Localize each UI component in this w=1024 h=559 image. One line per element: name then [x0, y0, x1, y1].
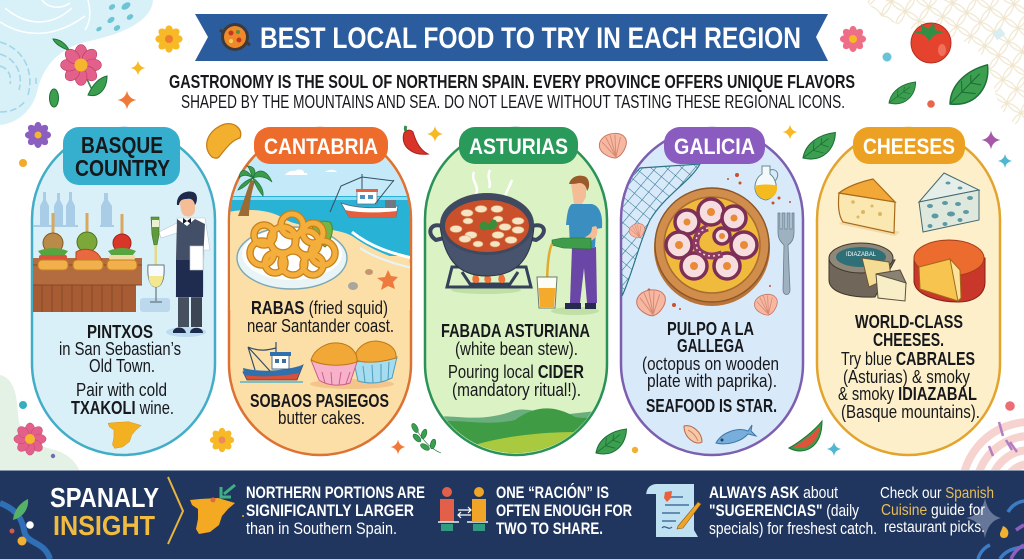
- icon: clam: [684, 426, 702, 443]
- basque text: Old Town.: [89, 356, 155, 376]
- galicia text: SEAFOOD IS STAR.: [646, 396, 777, 416]
- icon: scallop shell left: [635, 288, 668, 318]
- cantabria text 1: RABAS (fried squid): [251, 298, 388, 318]
- sparkle gold 3: [782, 124, 798, 140]
- title banner: [195, 14, 828, 61]
- panel: basque country: [32, 127, 215, 455]
- cantabria text 1: [247, 298, 394, 336]
- waiter pouring txakoli: [151, 192, 210, 337]
- spanaly insight heading: [50, 482, 159, 541]
- icon: green leaf: [803, 132, 835, 159]
- galicia text: plate with paprika).: [647, 371, 777, 391]
- insight 2 text: TWO TO SHARE.: [496, 519, 603, 538]
- icon: starfish and pebbles: [348, 269, 398, 290]
- blue cheese wedge: [919, 173, 979, 232]
- insight 2 text: ONE “RACIÓN” IS: [496, 483, 609, 502]
- dot teal: [882, 52, 892, 62]
- insight 3 text: "SUGERENCIAS" (daily: [709, 501, 859, 520]
- pintxo 3: [107, 214, 137, 270]
- background decoration: top right net: [866, 0, 1024, 128]
- beach scene: [230, 156, 410, 310]
- galicia text: (octopus on wooden: [642, 354, 779, 374]
- spanaly insight heading: INSIGHT: [53, 510, 155, 541]
- pill: cantabria: CANTABRIA: [264, 134, 378, 159]
- pill: basque country: BASQUE: [81, 132, 163, 158]
- icon: leaf large: [945, 65, 992, 105]
- icon: pink flower right: [840, 26, 866, 52]
- icon: pink flower bottom: [14, 423, 46, 455]
- icon: two people sharing: [438, 487, 488, 531]
- basque text: [59, 322, 181, 418]
- icon: scallop shell: [597, 130, 630, 161]
- galicia text: [642, 319, 779, 416]
- sparkle gold 2: [427, 126, 443, 142]
- sparkle orange: [118, 90, 136, 110]
- icon: empanada: [207, 124, 241, 158]
- cheeses text: WORLD-CLASS: [855, 312, 963, 332]
- galicia text: PULPO A LA: [667, 319, 754, 339]
- cheeses text: (Asturias) & smoky: [843, 367, 970, 387]
- steam: [473, 170, 512, 202]
- background decoration: bottom left green blob: [0, 375, 79, 470]
- insight 3 text: specials) for freshest catch.: [709, 519, 877, 538]
- chevron: [168, 477, 183, 544]
- sparkle gold: [130, 60, 146, 76]
- icon: pink flower: [53, 39, 107, 96]
- asturias text: FABADA ASTURIANA: [441, 321, 590, 341]
- paprika specks: [648, 173, 791, 310]
- decorative icons: lower area: [14, 401, 1015, 458]
- dot gold: [632, 447, 638, 453]
- pill: galicia: GALICIA: [674, 134, 755, 159]
- pill: galicia: [664, 127, 765, 164]
- icon: scallop shell right: [752, 292, 780, 318]
- panel: asturias: [425, 127, 607, 460]
- pintxo 2: [73, 213, 103, 270]
- glass of cider: [537, 277, 557, 308]
- pill: cheeses: CHEESES: [863, 134, 955, 159]
- icon: yellow flower: [155, 25, 183, 53]
- cantabria text 2: butter cakes.: [278, 408, 365, 428]
- insight 1 text: SIGNIFICANTLY LARGER: [246, 501, 414, 520]
- asturias text: Pouring local CIDER: [448, 362, 584, 382]
- stew pot on stove: [430, 193, 544, 294]
- pill: basque country: [63, 127, 180, 185]
- panel: cantabria: [228, 127, 412, 455]
- icon: leaf small: [889, 82, 916, 104]
- basque text: PINTXOS: [87, 322, 153, 342]
- pill: cantabria: [254, 127, 388, 164]
- icon: palm tree: [238, 166, 272, 216]
- icon: herb branch: [410, 422, 441, 453]
- cheeses text: & smoky IDIAZABAL: [838, 384, 977, 404]
- intro text: [169, 72, 855, 112]
- icon: sobaos cakes: [310, 341, 397, 389]
- dot teal: [19, 401, 27, 409]
- decorative icons: top area: [19, 23, 1012, 168]
- octopus board: [654, 188, 770, 306]
- icon: fish: [716, 425, 756, 444]
- footer decoration left: [0, 499, 50, 559]
- idiazabal cheese wheel: [829, 243, 906, 301]
- intro text: GASTRONOMY IS THE SOUL OF NORTHERN SPAIN. EVERY PROVINCE OFFERS UNIQUE FLAVORS: [169, 72, 855, 92]
- icon: tomato: [911, 23, 951, 63]
- icon: specials scroll and pencil: [646, 484, 701, 537]
- sparkle orange bottom: [390, 440, 406, 454]
- background decoration: bottom right pink rings: [962, 422, 1024, 558]
- dot red right: [1005, 401, 1015, 411]
- icon: chili: [403, 126, 428, 154]
- fishing net: [620, 164, 700, 296]
- wine glass: [140, 245, 170, 312]
- insight 2 text: [496, 483, 632, 538]
- pill: asturias: ASTURIAS: [469, 134, 568, 159]
- red wax cheese wheel: [914, 240, 985, 302]
- icon: small fishing boat: [240, 342, 303, 382]
- cuisine guide note: Check our Spanish: [880, 485, 994, 502]
- cheeses text: CHEESES.: [873, 330, 944, 350]
- basque text: Pair with cold: [76, 380, 167, 400]
- icon: purple flower: [25, 122, 51, 148]
- cheeses text: Try blue CABRALES: [841, 349, 975, 369]
- insight 1 text: [246, 483, 425, 538]
- background decoration: top left blue blob: [0, 0, 153, 125]
- cheeses text: [838, 312, 980, 422]
- asturias text: (mandatory ritual!).: [452, 380, 581, 400]
- green hills: [444, 408, 592, 453]
- icon: fishing boat: [330, 174, 398, 217]
- pill: basque country: COUNTRY: [75, 155, 170, 181]
- cheeses text: (Basque mountains).: [841, 402, 980, 422]
- icon: spain map: [108, 422, 141, 448]
- cuisine guide note: restaurant picks.: [884, 519, 985, 536]
- insight 2 text: OFTEN ENOUGH FOR: [496, 501, 632, 520]
- cheese wedge: [838, 179, 900, 236]
- pill: cheeses: [853, 127, 965, 164]
- dot purple: [51, 454, 55, 458]
- icon: spain with arrow: [190, 485, 244, 534]
- insight 1 text: than in Southern Spain.: [246, 519, 397, 538]
- small shell on net: [627, 221, 647, 240]
- footer decoration right: [966, 498, 1024, 559]
- bar shelf and bottles: [33, 192, 114, 227]
- cuisine guide note: [880, 485, 994, 536]
- asturias text: (white bean stew).: [455, 339, 578, 359]
- sparkle teal: [998, 154, 1012, 168]
- cantabria text 2: SOBAOS PASIEGOS: [250, 391, 389, 411]
- icon: olive oil jar: [755, 166, 778, 200]
- dot red: [927, 100, 935, 108]
- sparkle teal bottom: [827, 442, 841, 456]
- insight 1 text: NORTHERN PORTIONS ARE: [246, 483, 425, 502]
- bar counter: [33, 258, 142, 312]
- panel: cheeses: [817, 127, 1000, 455]
- sparkle purple: [982, 130, 1000, 150]
- idiazabal cheese wheel: IDIAZABAL: [846, 252, 877, 258]
- cuisine guide note: Cuisine guide for: [881, 502, 986, 519]
- pill: asturias: [459, 127, 578, 164]
- galicia text: GALLEGA: [677, 336, 744, 356]
- spanaly insight heading: SPANALY: [50, 482, 159, 513]
- icon: fork: [778, 213, 794, 294]
- plate of rabas: [237, 214, 347, 289]
- insight 3 text: ALWAYS ASK about: [709, 483, 838, 502]
- cantabria text 2: [250, 391, 389, 428]
- icon: leaf bottom: [596, 429, 626, 454]
- icon: paella pan: [220, 23, 250, 51]
- footer band: [0, 470, 1024, 559]
- basque text: TXAKOLI wine.: [71, 398, 174, 418]
- dot orange: [19, 159, 27, 167]
- icon: melon slice: [789, 421, 822, 451]
- pintxo 1: [38, 213, 68, 270]
- title text: BEST LOCAL FOOD TO TRY IN EACH REGION: [260, 22, 801, 55]
- panel: galicia: [620, 127, 803, 455]
- asturias text: [441, 321, 590, 400]
- icon: green leaf left: [50, 89, 58, 107]
- basque text: in San Sebastian’s: [59, 339, 181, 359]
- insight 3 text: [709, 483, 877, 538]
- cantabria text 1: near Santander coast.: [247, 316, 394, 336]
- person pouring cider: [547, 176, 602, 315]
- icon: yellow flower bottom: [210, 428, 234, 452]
